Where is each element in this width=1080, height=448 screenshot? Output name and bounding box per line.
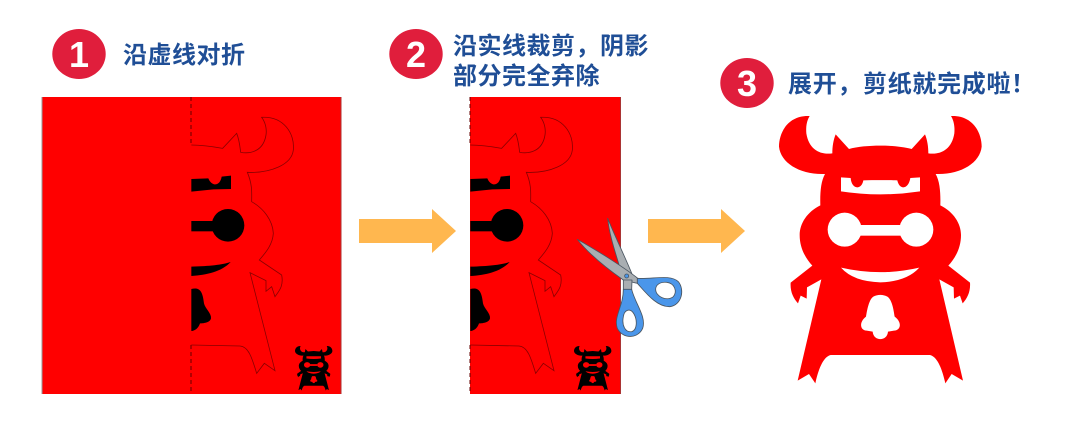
step 1 heading: [52, 29, 245, 79]
arrow: step 2 to step 3: [648, 209, 745, 253]
step 2 heading: 部分完全弃除: [453, 56, 600, 91]
icon: scissors: [577, 218, 682, 336]
step 3 heading: 剪纸就完成啦: [863, 64, 1011, 99]
step 3 heading: ！: [1011, 64, 1036, 99]
panel: paper with solid cut line: [470, 97, 620, 394]
step 1 heading: 1: [69, 34, 89, 75]
step 3 heading: 3: [737, 63, 757, 104]
smile: [841, 268, 919, 282]
mini figure: [295, 346, 332, 391]
finished paper-cut figure: [779, 116, 982, 383]
step 2 heading: 沿实线裁剪，: [453, 26, 600, 61]
step 3 heading: 展开，: [788, 64, 862, 99]
half figure outline and cut shapes: [470, 117, 572, 373]
panel: folded paper with dashed line: [42, 97, 341, 394]
step 1 heading: 沿虚线对折: [123, 35, 246, 70]
face slot: [841, 177, 920, 194]
step 2 heading: 阴影: [600, 26, 649, 61]
step 2 heading: 2: [406, 34, 426, 75]
arrow: step 1 to step 2: [359, 209, 456, 253]
half figure outline and cut shapes: [191, 117, 293, 373]
bell: [861, 295, 900, 339]
mini figure: [574, 346, 611, 391]
step 3 heading: [720, 58, 1036, 108]
goggles: [828, 213, 933, 247]
step 2 heading: [389, 26, 649, 91]
